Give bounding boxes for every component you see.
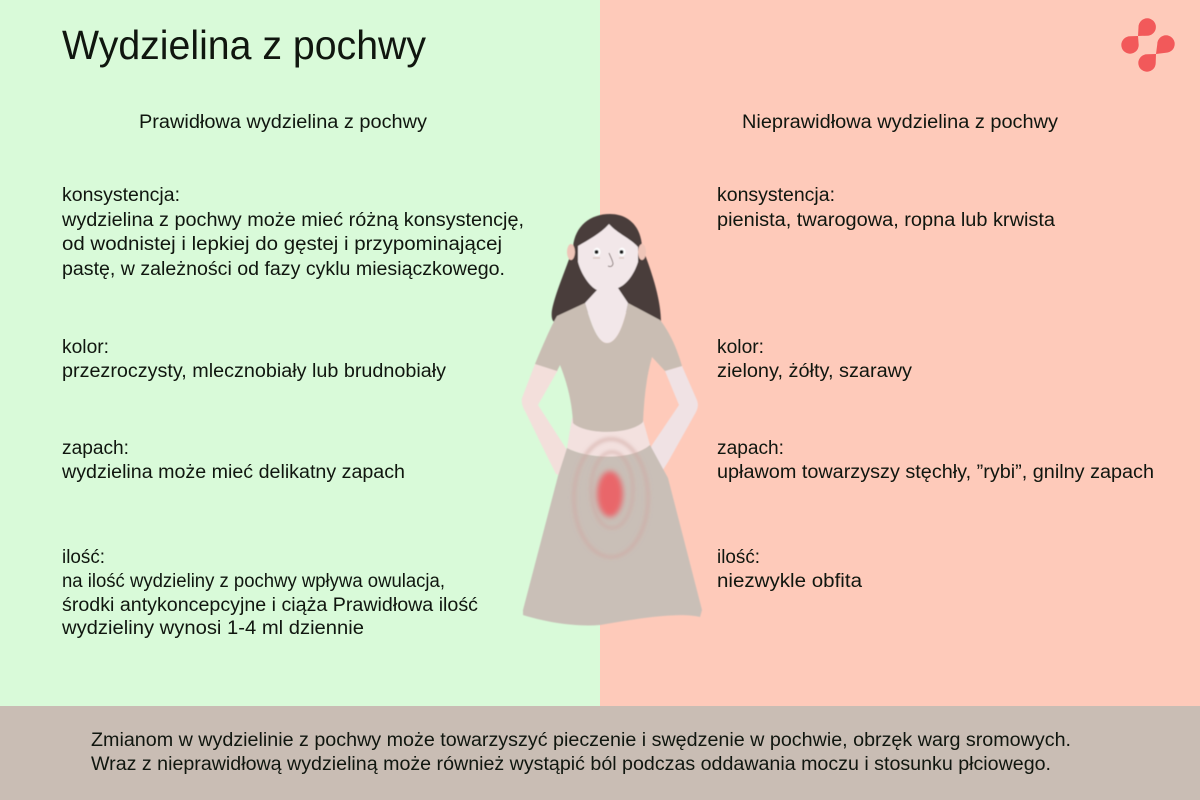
heading: normal discharge: Prawidłowa wydzielina z pochwy <box>139 112 428 133</box>
text block: normal colour: przezroczysty, mlecznobiały lub brudnobiały <box>62 361 447 382</box>
text block: abnormal consistency <box>717 185 1055 231</box>
text block: normal amount <box>61 547 478 639</box>
text block: normal smell: wydzielina może mieć delikatny zapach <box>61 462 405 483</box>
text block: abnormal amount: niezwykle obfita <box>717 571 862 592</box>
panel: abnormal discharge background <box>600 0 1200 706</box>
title: Wydzielina z pochwy <box>62 22 426 68</box>
text block: abnormal smell: zapach: <box>717 438 784 459</box>
text block: abnormal colour: kolor: <box>717 337 764 358</box>
footer text <box>91 730 1071 775</box>
text block: normal consistency: konsystencja: <box>62 185 180 206</box>
text block: normal amount: na ilość wydzieliny z pochwy wpływa owulacja, <box>62 571 445 592</box>
text block: normal smell <box>61 438 405 483</box>
illustration: woman with pelvic pain <box>522 214 702 625</box>
text block: normal amount: środki antykoncepcyjne i ciąża Prawidłowa ilość <box>62 595 478 616</box>
panel: normal discharge background <box>0 0 600 706</box>
text block: normal amount: ilość: <box>62 547 105 568</box>
text block: abnormal consistency: pienista, twarogowa, ropna lub krwista <box>717 210 1055 231</box>
text block: normal consistency: pastę, w zależności od fazy cyklu miesiączkowego. <box>62 259 505 280</box>
text block: abnormal colour <box>717 337 913 382</box>
text block: normal colour: kolor: <box>62 337 109 358</box>
text block: abnormal smell <box>717 438 1154 483</box>
icon: logo of four drops <box>1121 18 1175 72</box>
panel: footer background <box>0 706 1200 800</box>
text block: abnormal amount: ilość: <box>717 547 760 568</box>
text block: abnormal colour: zielony, żółty, szarawy <box>717 361 913 382</box>
text block: normal consistency: wydzielina z pochwy może mieć różną konsystencję, <box>61 210 524 231</box>
footer text: Zmianom w wydzielinie z pochwy może towarzyszyć pieczenie i swędzenie w pochwie, obrzęk warg sromowych. <box>91 730 1071 751</box>
text block: abnormal consistency: konsystencja: <box>717 185 835 206</box>
text block: normal colour <box>62 337 447 382</box>
text block: abnormal amount <box>717 547 862 592</box>
text block: abnormal smell: upławom towarzyszy stęchły, ”rybi”, gnilny zapach <box>717 462 1154 483</box>
text block: normal consistency: od wodnistej i lepkiej do gęstej i przypominającej <box>62 234 502 255</box>
footer text: Wraz z nieprawidłową wydzieliną może również wystąpić ból podczas oddawania moczu i stosunku płciowego. <box>91 754 1051 775</box>
text block: normal smell: zapach: <box>62 438 129 459</box>
text block: normal amount: wydzieliny wynosi 1-4 ml dziennie <box>61 618 364 639</box>
heading: abnormal discharge: Nieprawidłowa wydzielina z pochwy <box>742 112 1059 133</box>
text block: normal consistency <box>61 185 524 280</box>
